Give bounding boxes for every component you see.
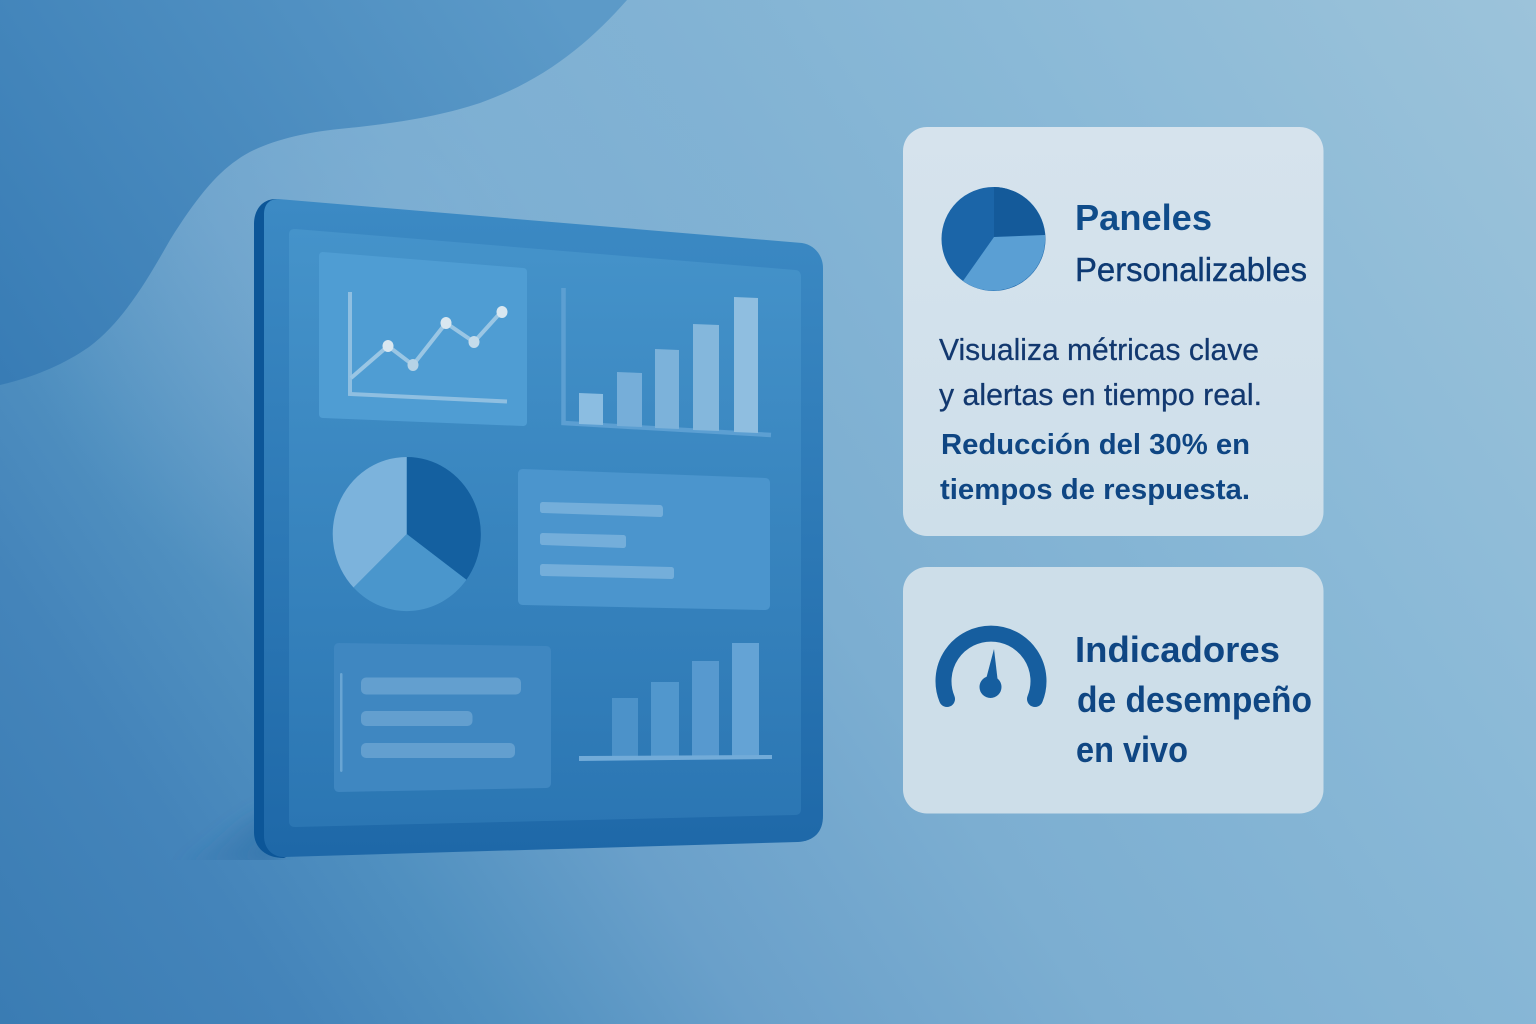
placeholder lines <box>540 502 674 579</box>
heading: personalizables: Personalizables <box>1075 251 1307 288</box>
panel: indicadores de desempeño <box>903 567 1324 814</box>
pie chart <box>333 457 481 611</box>
bar chart baseline <box>579 755 772 761</box>
bar chart lower right <box>579 643 772 761</box>
bar chart bars <box>612 643 759 756</box>
bar chart bars <box>579 297 758 433</box>
highlight text <box>940 429 1250 506</box>
background wave shape <box>0 0 627 385</box>
icon: gauge <box>944 634 1038 699</box>
line chart card <box>319 252 527 426</box>
description text: y alertas en tiempo real. <box>939 377 1262 412</box>
inner screen <box>289 229 801 827</box>
tablet side edge <box>254 199 300 858</box>
line chart series <box>351 311 502 378</box>
highlight text: Reducción del 30% en <box>941 429 1250 461</box>
description text <box>939 332 1262 412</box>
tablet shadow <box>218 819 281 860</box>
text card middle <box>518 469 770 610</box>
tablet face <box>264 199 823 857</box>
text card lower <box>334 643 551 792</box>
placeholder lines <box>361 678 521 758</box>
heading: indicadores de desempeño en vivo: Indicadores <box>1075 629 1280 670</box>
dashboard tablet <box>254 199 823 858</box>
bar chart top right <box>564 288 771 435</box>
line chart points <box>382 306 508 371</box>
heading: indicadores de desempeño en vivo <box>1075 629 1312 770</box>
line chart axes <box>350 292 507 402</box>
panel: paneles personalizables <box>903 127 1324 536</box>
heading: indicadores de desempeño en vivo: en vivo <box>1076 729 1188 770</box>
bar chart axes <box>564 288 771 435</box>
highlight text: tiempos de respuesta. <box>940 474 1250 506</box>
heading: paneles: Paneles <box>1075 197 1212 238</box>
description text: Visualiza métricas clave <box>939 332 1259 367</box>
card accent line <box>340 673 342 772</box>
heading: indicadores de desempeño en vivo: de desempeño <box>1077 679 1312 720</box>
icon: pie chart <box>942 187 1046 291</box>
